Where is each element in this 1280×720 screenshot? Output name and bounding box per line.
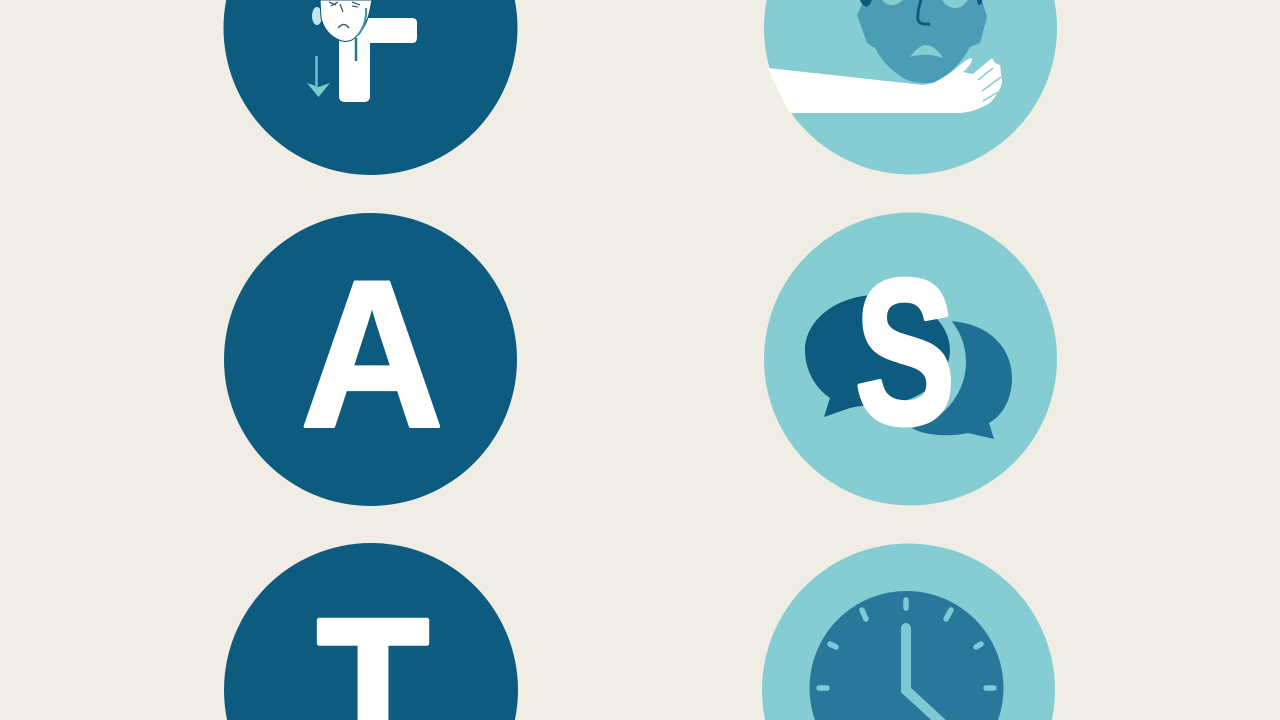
- panel: F face droop, light circle: [764, 0, 1057, 174]
- icon: supporting arm and hand: [768, 58, 1002, 113]
- icon: back speech bubble: [900, 321, 1012, 439]
- panel: T time: [224, 543, 518, 720]
- icon: letter F body: [339, 18, 417, 102]
- letter A: A: [300, 236, 444, 472]
- icon: face: [857, 0, 987, 83]
- letter S: S: [855, 237, 955, 467]
- icon: front speech bubble: [805, 295, 950, 417]
- panel: A arm: [224, 213, 517, 506]
- panel: S speech: [764, 212, 1057, 506]
- icon: clock face: [810, 591, 1004, 720]
- icon: bubble separation gap: [824, 294, 966, 430]
- icon: clock hands: [906, 628, 945, 720]
- icon: drooping face: [312, 0, 372, 61]
- panel: clock: [762, 544, 1055, 720]
- panel: F face droop: [224, 0, 518, 175]
- icon: down arrow: [307, 56, 330, 97]
